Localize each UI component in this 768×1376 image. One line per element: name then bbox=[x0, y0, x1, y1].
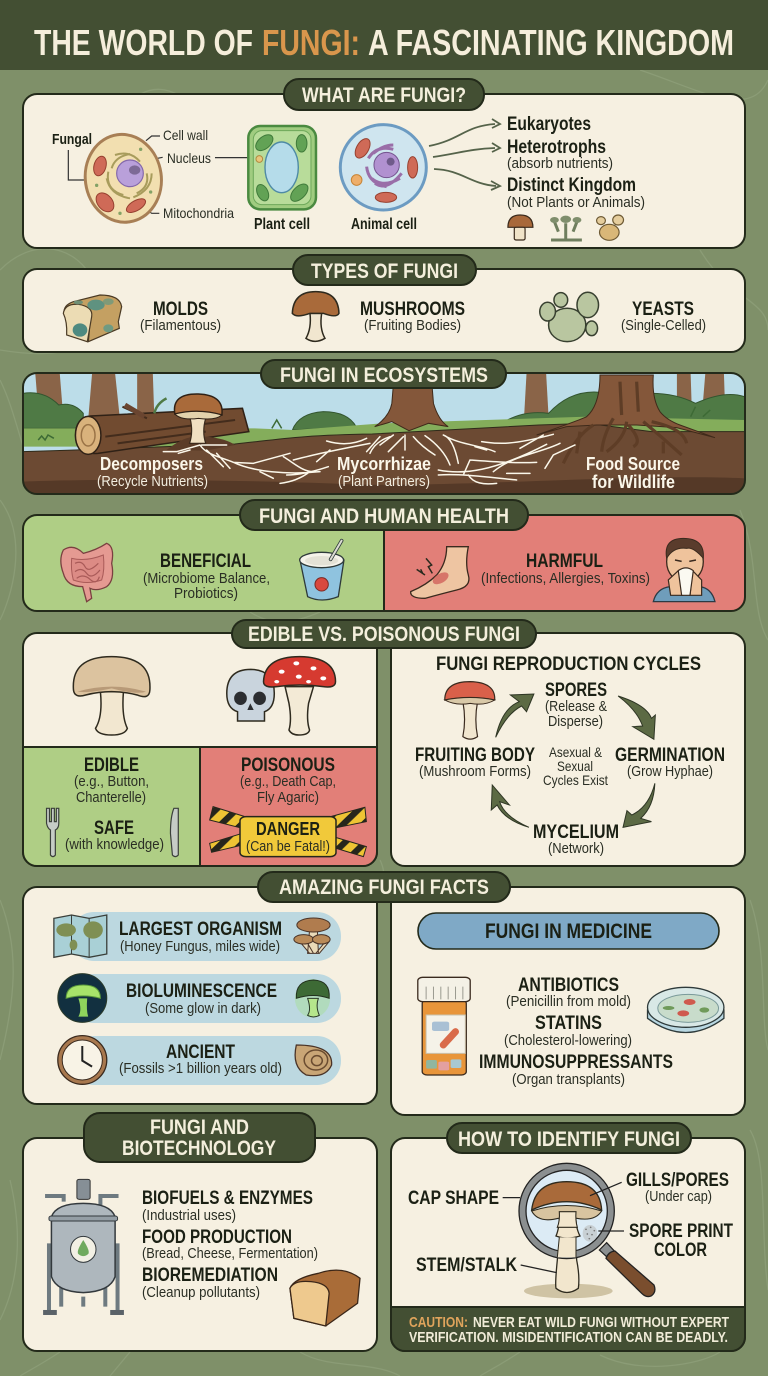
fallen log with mushroom bbox=[38, 394, 710, 454]
fact: bioluminescence: BIOLUMINESCENCE bbox=[126, 980, 277, 1002]
label: food source bbox=[586, 453, 680, 492]
label: beneficial bbox=[143, 550, 270, 602]
label: mycorrhizae: Mycorrhizae bbox=[337, 453, 431, 474]
cycle stage: germination: GERMINATION bbox=[615, 744, 725, 766]
title band bbox=[0, 0, 768, 70]
fact: largest organism bbox=[54, 912, 341, 961]
heading: biotechnology bbox=[84, 1113, 315, 1162]
heading: fungi in medicine: FUNGI IN MEDICINE bbox=[485, 920, 652, 943]
icons: small fungi bbox=[508, 215, 624, 240]
heading: how to identify bbox=[447, 1123, 691, 1153]
icon: mushroom cluster bbox=[294, 918, 330, 953]
label: beneficial: Probiotics) bbox=[174, 586, 238, 602]
fact: bioluminescence: (Some glow in dark) bbox=[145, 1001, 261, 1017]
label: harmful: (Infections, Allergies, Toxins) bbox=[481, 571, 650, 587]
icon: petri dish bbox=[648, 987, 724, 1032]
icon: foot bbox=[411, 547, 469, 598]
danger sign bbox=[210, 807, 366, 857]
poisonous section: POISONOUS bbox=[241, 754, 335, 776]
fact: largest organism: (Honey Fungus, miles wide) bbox=[120, 939, 280, 955]
heading: what are fungi bbox=[284, 79, 484, 110]
white hyphae network bbox=[163, 434, 575, 484]
label: spore print color: COLOR bbox=[654, 1239, 707, 1261]
icon: magnifying glass over mushroom bbox=[503, 1163, 655, 1298]
cycle stage: mycelium bbox=[533, 821, 619, 857]
icon: bread loaf bbox=[290, 1270, 360, 1326]
caution banner: CAUTION: bbox=[409, 1315, 468, 1331]
cycle stage: spores: (Release & bbox=[545, 699, 607, 715]
label: harmful bbox=[481, 550, 650, 587]
medicine list: (Cholesterol-lowering) bbox=[504, 1033, 632, 1049]
fact: largest organism: LARGEST ORGANISM bbox=[119, 918, 282, 940]
poisonous section bbox=[200, 747, 377, 866]
panel: amazing fungi facts bbox=[23, 872, 510, 1104]
cycle stage: spores: SPORES bbox=[545, 679, 607, 701]
label: mycorrhizae: (Plant Partners) bbox=[338, 474, 430, 490]
edible section bbox=[23, 747, 200, 866]
heading: reproduction cycles: FUNGI REPRODUCTION CYCLES bbox=[436, 653, 701, 675]
label: decomposers: (Recycle Nutrients) bbox=[97, 474, 208, 490]
label: cap shape: CAP SHAPE bbox=[408, 1187, 499, 1209]
medicine list: STATINS bbox=[535, 1012, 602, 1034]
biotech list: (Industrial uses) bbox=[142, 1208, 236, 1224]
medicine list: (Organ transplants) bbox=[512, 1072, 625, 1088]
cycle stage: fruiting body bbox=[415, 744, 535, 780]
cycle stage: fruiting body: (Mushroom Forms) bbox=[419, 764, 531, 780]
heading: fungi and human health bbox=[240, 500, 528, 530]
icon: bioreactor bbox=[43, 1179, 124, 1315]
fungal cell diagram: Mitochondria bbox=[163, 205, 234, 221]
label: molds: (Filamentous) bbox=[140, 318, 221, 334]
heading: amazing fungi facts bbox=[258, 872, 510, 902]
icon: moldy bread bbox=[63, 295, 122, 342]
heading: biotechnology: FUNGI AND bbox=[150, 1116, 249, 1139]
characteristics list: Distinct Kingdom bbox=[507, 174, 636, 196]
label: mycorrhizae bbox=[337, 453, 431, 490]
label: food source: Food Source bbox=[586, 453, 680, 474]
characteristics list: Eukaryotes bbox=[507, 113, 591, 135]
fact: ancient: ANCIENT bbox=[166, 1041, 235, 1063]
label: molds: MOLDS bbox=[153, 298, 208, 320]
cycle stage: germination: (Grow Hyphae) bbox=[627, 764, 713, 780]
biotech list bbox=[142, 1187, 318, 1301]
heading: biotechnology: BIOTECHNOLOGY bbox=[122, 1137, 276, 1160]
panel: what are fungi bbox=[23, 79, 745, 248]
label: beneficial: BENEFICIAL bbox=[160, 550, 251, 572]
icons: fork and knife bbox=[47, 808, 178, 857]
cycle arrows bbox=[491, 694, 655, 827]
medicine list bbox=[479, 974, 673, 1088]
label: spore print color bbox=[629, 1220, 733, 1261]
fungal cell diagram bbox=[52, 127, 234, 227]
arrows to characteristics bbox=[429, 119, 500, 190]
icon: mushroom bbox=[292, 292, 339, 341]
biotech list: BIOFUELS & ENZYMES bbox=[142, 1187, 313, 1209]
medicine list: (Penicillin from mold) bbox=[506, 994, 631, 1010]
heading: edible vs poisonous: EDIBLE VS. POISONOUS FUNGI bbox=[248, 623, 520, 646]
cycle stage: germination bbox=[615, 744, 725, 780]
panel: biotechnology bbox=[23, 1113, 377, 1351]
icon: skull and fly agaric bbox=[227, 657, 336, 735]
edible section: (with knowledge) bbox=[65, 837, 164, 853]
label: gills and pores bbox=[626, 1169, 729, 1205]
characteristics list: (absorb nutrients) bbox=[507, 156, 613, 172]
label: yeasts bbox=[621, 298, 706, 334]
animal cell bbox=[340, 125, 426, 233]
fact: ancient: (Fossils >1 billion years old) bbox=[119, 1061, 282, 1077]
plant cell: Plant cell bbox=[254, 216, 310, 233]
heading: fungi in medicine bbox=[418, 913, 719, 949]
heading: types of fungi bbox=[293, 255, 476, 285]
icon: edible mushroom bbox=[73, 657, 150, 735]
label: yeasts: (Single-Celled) bbox=[621, 318, 706, 334]
icon: glowing mushroom bbox=[58, 974, 107, 1022]
danger sign: (Can be Fatal!) bbox=[246, 839, 330, 855]
danger sign: DANGER bbox=[256, 818, 320, 839]
edible section: (e.g., Button, bbox=[74, 774, 149, 790]
label: mushrooms: (Fruiting Bodies) bbox=[364, 318, 461, 334]
icon: red mushroom bbox=[445, 682, 495, 739]
panel: types of fungi bbox=[23, 255, 745, 352]
edible section: SAFE bbox=[94, 817, 134, 839]
cycle stage: spores: Disperse) bbox=[548, 714, 603, 730]
edible section: EDIBLE bbox=[84, 754, 139, 776]
fungal cell diagram: Fungal bbox=[52, 132, 92, 148]
label: mushrooms bbox=[360, 298, 465, 334]
panel: reproduction cycles bbox=[391, 633, 745, 866]
medicine list: ANTIBIOTICS bbox=[518, 974, 619, 996]
icon: pill bottle bbox=[418, 977, 470, 1075]
heading: fungi and human health: FUNGI AND HUMAN HEALTH bbox=[259, 505, 509, 528]
fungal cell diagram: Nucleus bbox=[167, 150, 211, 166]
panel: how to identify fungi bbox=[391, 1123, 745, 1351]
label: decomposers: Decomposers bbox=[100, 453, 203, 474]
heading: what are fungi: WHAT ARE FUNGI? bbox=[302, 84, 466, 107]
characteristics list: Heterotrophs bbox=[507, 136, 606, 158]
label: stem: STEM/STALK bbox=[416, 1254, 517, 1276]
icon: fossil shell bbox=[295, 1045, 332, 1076]
icon: sneezing person bbox=[653, 538, 715, 602]
biotech list: (Cleanup pollutants) bbox=[142, 1285, 260, 1301]
icon: intestines bbox=[61, 543, 113, 602]
cycle center note: Asexual & bbox=[549, 744, 603, 760]
cycle stage: spores bbox=[545, 679, 607, 730]
biotech list: BIOREMEDIATION bbox=[142, 1264, 278, 1286]
animal cell: Animal cell bbox=[351, 216, 417, 233]
title bbox=[34, 22, 734, 63]
panel: fungi in ecosystems bbox=[23, 360, 745, 494]
characteristics list bbox=[507, 113, 645, 211]
icon: map bbox=[54, 915, 107, 957]
title: FUNGI: bbox=[262, 22, 360, 63]
heading: how to identify: HOW TO IDENTIFY FUNGI bbox=[458, 1128, 680, 1151]
cycle stage: fruiting body: FRUITING BODY bbox=[415, 744, 535, 766]
icon: green mushroom bbox=[295, 979, 330, 1018]
label: molds bbox=[140, 298, 221, 334]
icon: yeast bbox=[540, 292, 599, 342]
label: yeasts: YEASTS bbox=[632, 298, 694, 320]
label: decomposers bbox=[97, 453, 208, 490]
heading: types of fungi: TYPES OF FUNGI bbox=[311, 260, 458, 283]
big tree with roots bbox=[537, 375, 715, 463]
label: spore print color: SPORE PRINT bbox=[629, 1220, 733, 1242]
label: beneficial: (Microbiome Balance, bbox=[143, 571, 270, 587]
label: gills and pores: GILLS/PORES bbox=[626, 1169, 729, 1191]
edible section: Chanterelle) bbox=[76, 790, 146, 806]
icon: clock bbox=[58, 1036, 107, 1084]
heading: fungi in ecosystems: FUNGI IN ECOSYSTEMS bbox=[280, 364, 488, 387]
cycle center note: Sexual bbox=[557, 758, 593, 774]
panel: edible vs poisonous bbox=[23, 620, 536, 866]
caution banner bbox=[391, 1307, 745, 1351]
fact: bioluminescence bbox=[58, 974, 341, 1023]
panel: fungi in medicine bbox=[391, 887, 745, 1115]
heading: amazing fungi facts: AMAZING FUNGI FACTS bbox=[279, 876, 489, 899]
poisonous section: Fly Agaric) bbox=[257, 790, 319, 806]
icon: yogurt bbox=[300, 541, 344, 600]
biotech list: FOOD PRODUCTION bbox=[142, 1226, 292, 1248]
plant cell bbox=[215, 126, 316, 233]
biotech list: (Bread, Cheese, Fermentation) bbox=[142, 1246, 318, 1262]
panel: fungi and human health bbox=[23, 500, 745, 611]
cycle stage: mycelium: MYCELIUM bbox=[533, 821, 619, 843]
cycle center note: Cycles Exist bbox=[543, 772, 608, 788]
cycle center note bbox=[543, 744, 608, 788]
medicine list: IMMUNOSUPPRESSANTS bbox=[479, 1051, 673, 1073]
label: harmful: HARMFUL bbox=[526, 550, 603, 572]
label: gills and pores: (Under cap) bbox=[645, 1189, 712, 1205]
label: mushrooms: MUSHROOMS bbox=[360, 298, 465, 320]
label: food source: for Wildlife bbox=[592, 471, 675, 492]
cycle stage: mycelium: (Network) bbox=[548, 841, 604, 857]
title: THE WORLD OF bbox=[34, 22, 253, 63]
illustration: forest cross-section bbox=[23, 373, 744, 494]
poisonous section: (e.g., Death Cap, bbox=[240, 774, 336, 790]
characteristics list: (Not Plants or Animals) bbox=[507, 195, 645, 211]
fact: ancient bbox=[58, 1036, 341, 1085]
fungal cell diagram: Cell wall bbox=[163, 127, 208, 143]
